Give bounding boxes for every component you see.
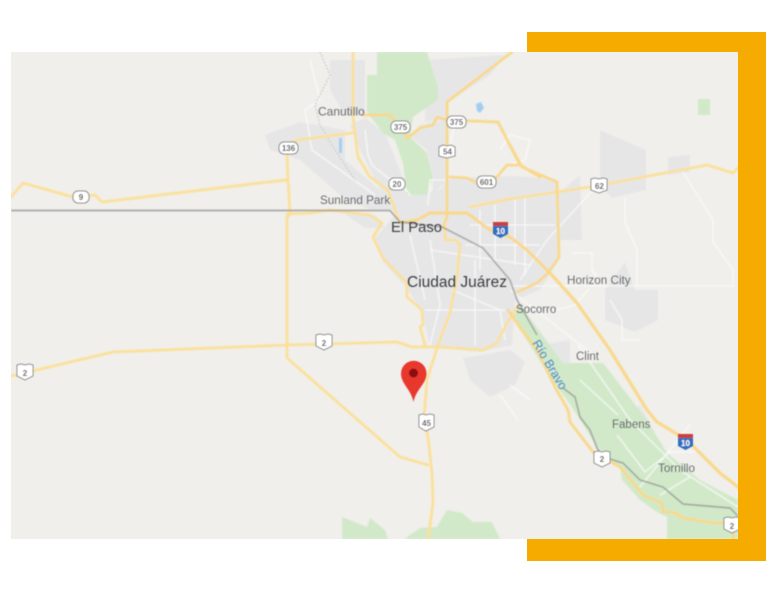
shield: 2 centre: 2 — [322, 339, 327, 348]
label: Canutillo: Canutillo — [318, 104, 365, 118]
road: highway 136 — [287, 150, 428, 465]
icon: red location pin — [401, 361, 426, 402]
shield: I-10 centre — [493, 222, 508, 238]
shield: 45 — [419, 414, 434, 431]
shield: 62 — [591, 178, 607, 193]
shield: 601 — [477, 176, 496, 188]
road: Highway 2 valley — [508, 310, 733, 539]
shield: 601: 601 — [480, 178, 494, 187]
shield: 375 east: 375 — [450, 118, 464, 127]
label: Clint: Clint — [576, 351, 600, 363]
shield: 2 west: 2 — [23, 369, 28, 378]
road: highway 9 — [11, 180, 285, 202]
shield: I-10 east: 10 — [681, 439, 690, 448]
label: Sunland Park: Sunland Park — [320, 194, 390, 207]
shield: 2 centre — [316, 334, 332, 350]
shield: 54: 54 — [443, 148, 452, 156]
green area: river valley — [512, 305, 738, 539]
label: Ciudad Juárez: Ciudad Juárez — [407, 274, 507, 291]
shield: 136: 136 — [282, 144, 296, 153]
road: Loop 375 — [363, 115, 540, 177]
label: Río Bravo: Río Bravo — [529, 337, 570, 392]
shield: 2 west — [17, 364, 33, 380]
shield: 54 — [439, 145, 455, 158]
shield: 136 — [279, 142, 298, 154]
border and river line — [11, 210, 738, 516]
shield: 375 west: 375 — [394, 123, 408, 132]
shield: 9: 9 — [79, 193, 84, 202]
shield: 2 valley: 2 — [600, 455, 605, 464]
road shields — [17, 116, 740, 533]
shield: 375 east — [447, 116, 466, 128]
road: I-10 north — [353, 52, 400, 223]
shield: 2 east — [724, 517, 740, 533]
road: US 62 — [470, 165, 738, 207]
road: US 54 — [443, 52, 512, 227]
road: highway 2 west — [11, 307, 517, 376]
road: east loop — [510, 145, 559, 292]
shield: 9 — [73, 191, 89, 203]
place labels — [318, 104, 696, 475]
shield: 20: 20 — [393, 180, 402, 189]
water — [339, 102, 484, 153]
green areas — [342, 52, 738, 539]
shield: 2 valley — [594, 451, 610, 467]
map panel — [11, 52, 740, 539]
label: Socorro: Socorro — [516, 304, 556, 316]
shield: 45: 45 — [422, 419, 431, 428]
yellow highways — [11, 52, 738, 539]
dotted trail — [315, 52, 355, 180]
shield: 20 — [389, 178, 405, 190]
shield: 375 west — [391, 121, 410, 133]
urban areas — [265, 55, 690, 428]
shield: 2 east: 2 — [730, 522, 735, 531]
road: highway 45 — [424, 245, 460, 539]
shield: 62: 62 — [595, 182, 604, 191]
label: Tornillo: Tornillo — [658, 462, 696, 475]
green area: southern mountains — [342, 517, 388, 539]
white minor roads — [305, 60, 738, 507]
label: Fabens: Fabens — [612, 419, 651, 431]
green area: Franklin Mountains — [367, 52, 438, 195]
shield: I-10 east — [678, 434, 693, 450]
shield: I-10 centre: 10 — [496, 227, 505, 236]
orange frame block — [527, 32, 766, 561]
label: El Paso: El Paso — [391, 220, 442, 236]
label: Horizon City: Horizon City — [567, 274, 631, 287]
